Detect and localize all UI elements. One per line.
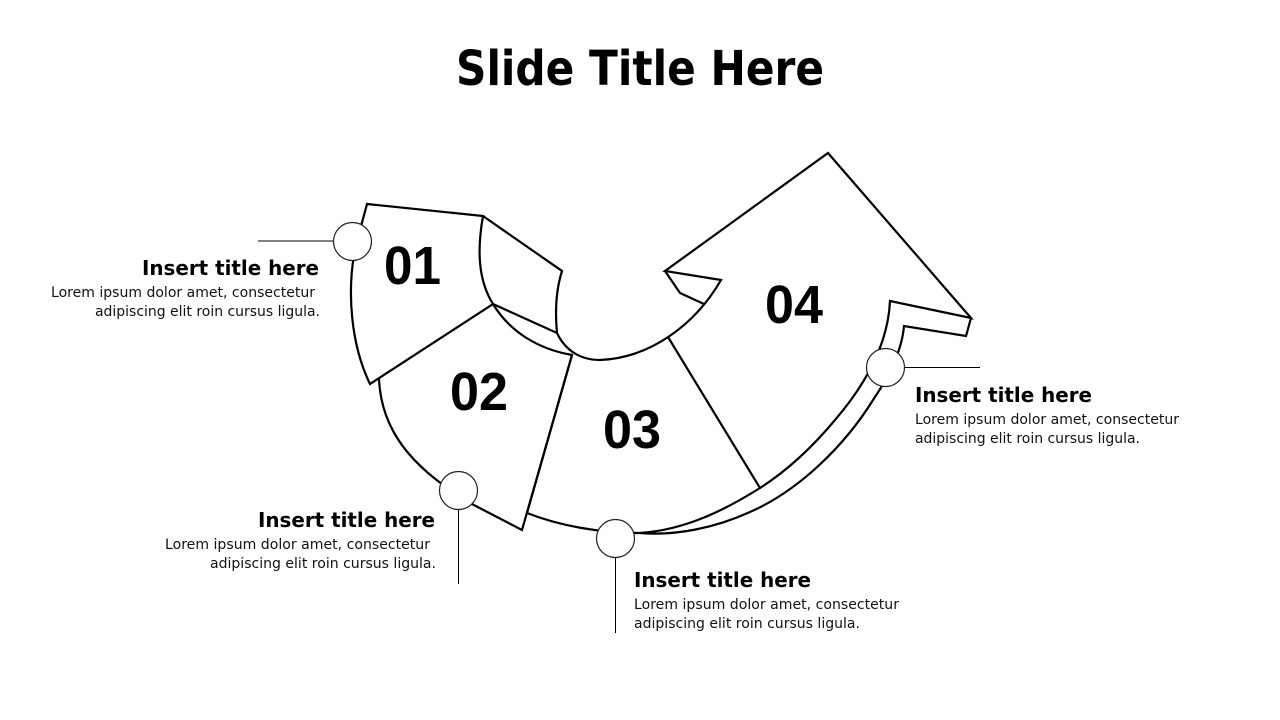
callout 4: Lorem ipsum dolor amet, consectetur: [915, 412, 1179, 428]
callout 4: adipiscing elit roin cursus ligula.: [915, 431, 1140, 447]
callout 2: [165, 472, 478, 584]
number 04: 04: [765, 275, 823, 335]
callout 1: [51, 222, 372, 320]
segment 01 fold: [483, 216, 562, 333]
callout 3: Insert title here: [634, 568, 811, 592]
title: Slide Title Here: [456, 41, 824, 97]
callout 2: Insert title here: [258, 508, 435, 532]
number 03: 03: [603, 400, 661, 460]
callout 1: Lorem ipsum dolor amet, consectetur: [51, 285, 315, 301]
number 02: 02: [450, 362, 508, 422]
arrow fold: [665, 271, 704, 304]
segment 01: [351, 204, 562, 384]
callout 3: adipiscing elit roin cursus ligula.: [634, 616, 860, 632]
callout 3: Lorem ipsum dolor amet, consectetur: [634, 597, 899, 613]
segment 02: [379, 304, 572, 530]
arrow edge: [640, 318, 971, 534]
callout 2: adipiscing elit roin cursus ligula.: [210, 556, 436, 572]
callout 4: Insert title here: [915, 383, 1092, 407]
segment 04 arrow: [557, 153, 971, 534]
callout 4: [866, 348, 1179, 447]
number 01: 01: [384, 236, 441, 296]
callout 3: [596, 520, 899, 633]
callout 1: adipiscing elit roin cursus ligula.: [95, 304, 320, 320]
callout 1: Insert title here: [142, 256, 319, 280]
segment 03: [527, 337, 760, 533]
callout 2: Lorem ipsum dolor amet, consectetur: [165, 537, 430, 553]
curved arrow diagram: [351, 153, 971, 534]
